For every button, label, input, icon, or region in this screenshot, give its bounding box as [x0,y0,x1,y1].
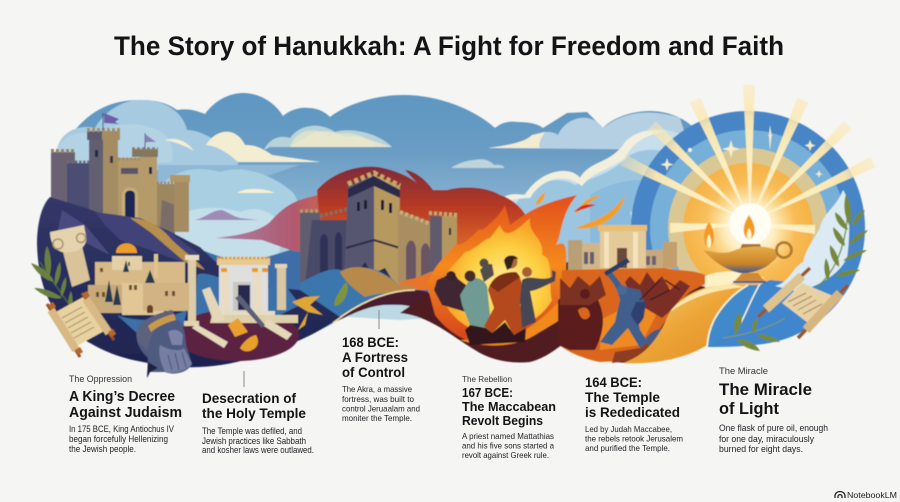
text: the miracle [719,366,828,455]
text: rebellion: The Maccabean [462,399,556,414]
text: rebellion [462,374,556,460]
text: rededication: 164 BCE: [585,374,642,390]
illustration panorama [31,85,876,378]
desecrated temple [184,255,323,351]
text: rebellion: 167 BCE: [462,385,513,400]
flames [427,192,625,345]
text: desecration [202,390,314,455]
lower blue swell under lamp [707,250,861,347]
text: rebellion: A priest named Mattathias [462,431,554,441]
blue mid hills [195,248,430,353]
text: rededication: Led by Judah Maccabee, [585,424,672,434]
text: fortress: fortress, was built to [342,394,414,404]
dark hillside [37,197,340,367]
lamp glow [704,182,796,274]
divider: temple caption [243,371,245,387]
divider: fortress caption [378,310,380,329]
text: the oppression [69,374,182,454]
sun disc with rings [631,111,865,345]
text: the miracle: The Miracle [719,380,812,399]
text: rebellion: and his five sons started a [462,440,554,450]
left scroll [47,291,116,357]
text: rededication [585,374,683,453]
left castle [51,113,190,238]
text: desecration: Desecration of [202,390,296,406]
text: desecration: and kosher laws were outlawed. [202,445,314,455]
notebooklm logo: NotebookLM [847,490,897,500]
oil lamp [703,215,792,283]
text: fortress: of Control [342,364,405,380]
text: the oppression: A King’s Decree [69,389,175,405]
text: the oppression: began forcefully Hellenizing [69,434,168,444]
red dome sky [317,167,530,290]
text: rededication: and purified the Temple. [585,443,670,453]
text: the miracle: for one day, miraculously [719,434,814,445]
title: The Story of Hanukkah: A Fight for Freedom and Faith [114,31,784,61]
text: rebellion: The Rebellion [462,374,512,384]
text: the miracle: One flask of pure oil, enough [719,423,828,434]
rebel figures [434,255,556,345]
text: rebellion: revolt against Greek rule. [462,450,549,460]
text: rededication: the rebels retook Jerusalem [585,434,683,444]
light rays [620,85,876,234]
ruined ground [175,309,299,361]
dark fire base [400,260,720,363]
text: desecration: The Temple was defiled, and [202,426,302,436]
left laurel branch [31,246,73,313]
battle scene [558,258,712,363]
text: fortress: 168 BCE: [342,334,399,350]
hills below fortress [300,267,470,340]
red sky wisps [216,178,345,260]
right cloud [775,190,849,292]
text: the oppression: Against Judaism [69,405,182,421]
broken column capital [50,225,90,287]
hilltop city [88,243,189,345]
right laurel branch [817,194,868,287]
right scroll [758,268,848,338]
golden wave [622,272,765,363]
sky [57,93,720,320]
text: desecration: Jewish practices like Sabbath [202,436,306,446]
text: fortress [342,334,420,423]
fortress of control [300,173,457,290]
text: fortress: moniter the Temple. [342,413,412,423]
text: fortress: A Fortress [342,349,408,365]
text: the miracle: The Miracle [719,366,768,377]
text: the miracle: of Light [719,399,779,418]
text: rededication: is Rededicated [585,404,680,420]
text: the miracle: burned for eight days. [719,444,803,455]
text: fortress: control Jeruaalam and [342,404,420,414]
king antiochus head [137,310,192,378]
text: rededication: The Temple [585,389,660,405]
text: the oppression: In 175 BCE, King Antiochus IV [69,424,174,434]
lower laurel branch [723,313,785,351]
text: desecration: the Holy Temple [202,405,306,421]
distant purple cloud [195,210,258,220]
text: the oppression: the Jewish people. [69,444,136,454]
text: fortress: The Akra, a massive [342,384,412,394]
text: the oppression: The Oppression [69,374,132,384]
temple and rebel army [560,225,690,285]
text: rebellion: Revolt Begins [462,413,543,428]
hillside ridges [58,210,300,330]
